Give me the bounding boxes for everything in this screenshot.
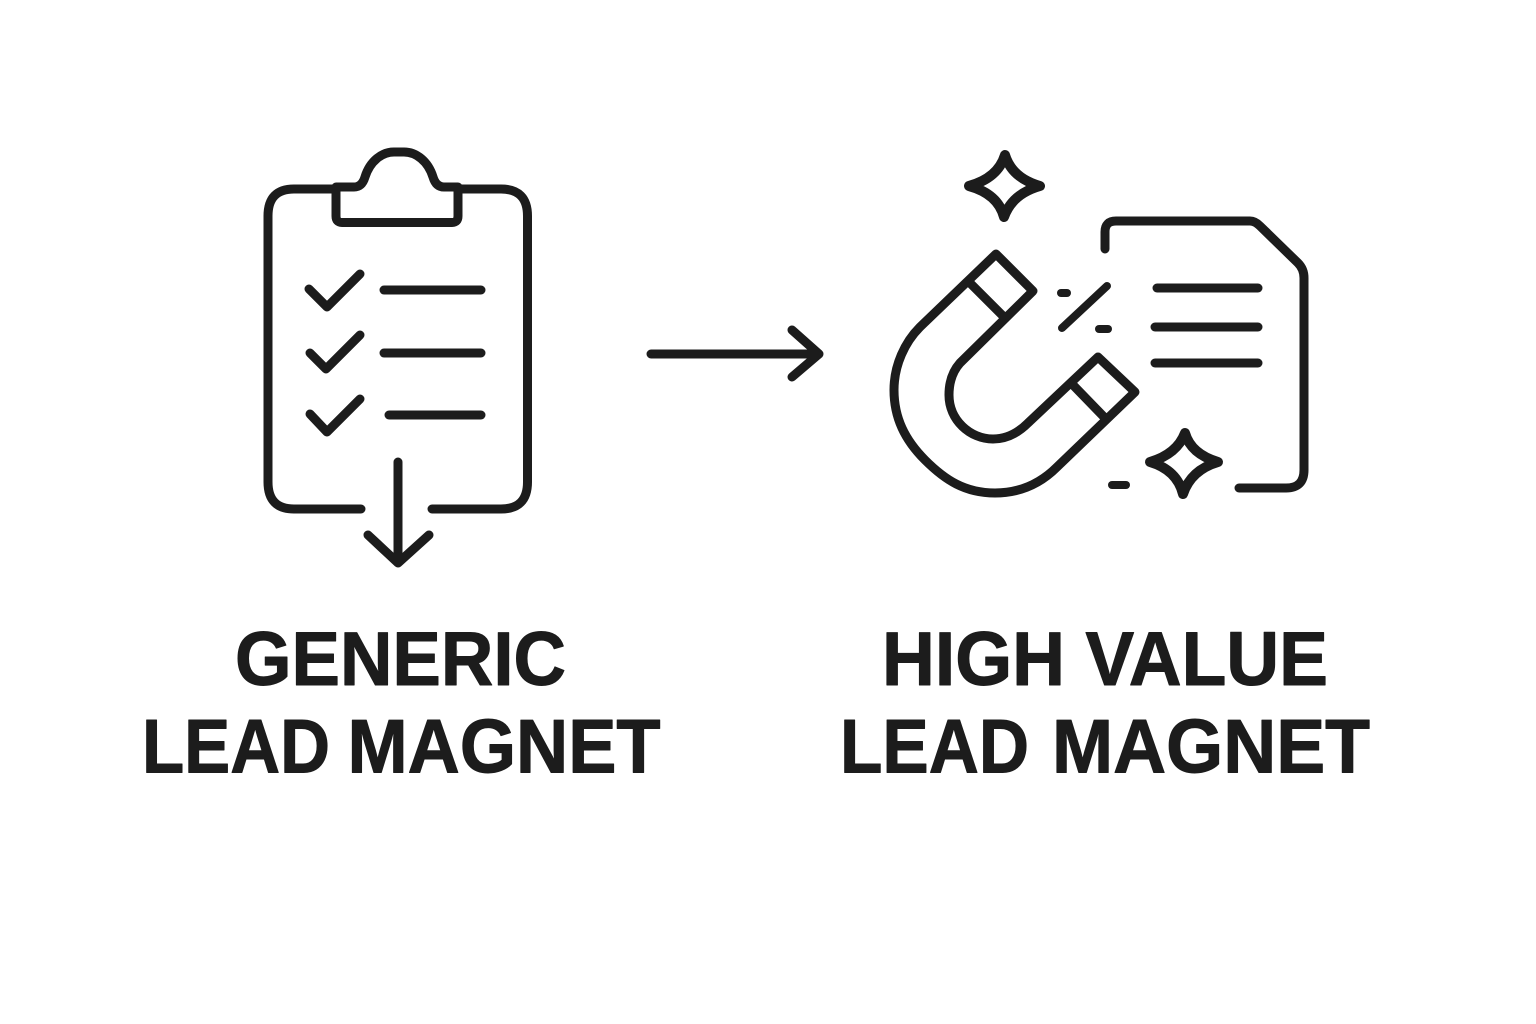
heading: generic lead magnet: LEAD: [142, 704, 330, 790]
magnet: [894, 254, 1135, 493]
heading: generic lead magnet: [142, 617, 660, 790]
sparkle bottom: [1150, 433, 1218, 494]
icon: magnet with document: [894, 155, 1304, 494]
heading: generic lead magnet: GENERIC: [235, 617, 566, 702]
checklist row 1: [309, 274, 481, 307]
clipboard clip: [336, 152, 458, 222]
magnet pole band 1: [970, 283, 1003, 316]
icon: clipboard checklist: [268, 152, 528, 563]
document: [1105, 221, 1304, 488]
motion lines: [1061, 286, 1126, 485]
sparkle top: [969, 155, 1040, 217]
heading: high value lead magnet: MAGNET: [1052, 704, 1370, 790]
heading: high value lead magnet: LEAD: [840, 704, 1029, 790]
clipboard body: [268, 189, 528, 509]
magnet pole band 2: [1073, 385, 1105, 418]
down arrow: [368, 462, 429, 563]
checklist row 3: [310, 399, 481, 432]
heading: high value lead magnet: HIGH VALUE: [882, 617, 1328, 702]
document lines: [1155, 288, 1258, 363]
arrow: generic to high value: [651, 330, 819, 377]
checklist row 2: [310, 335, 481, 369]
heading: high value lead magnet: [840, 617, 1370, 790]
heading: generic lead magnet: MAGNET: [348, 704, 660, 790]
